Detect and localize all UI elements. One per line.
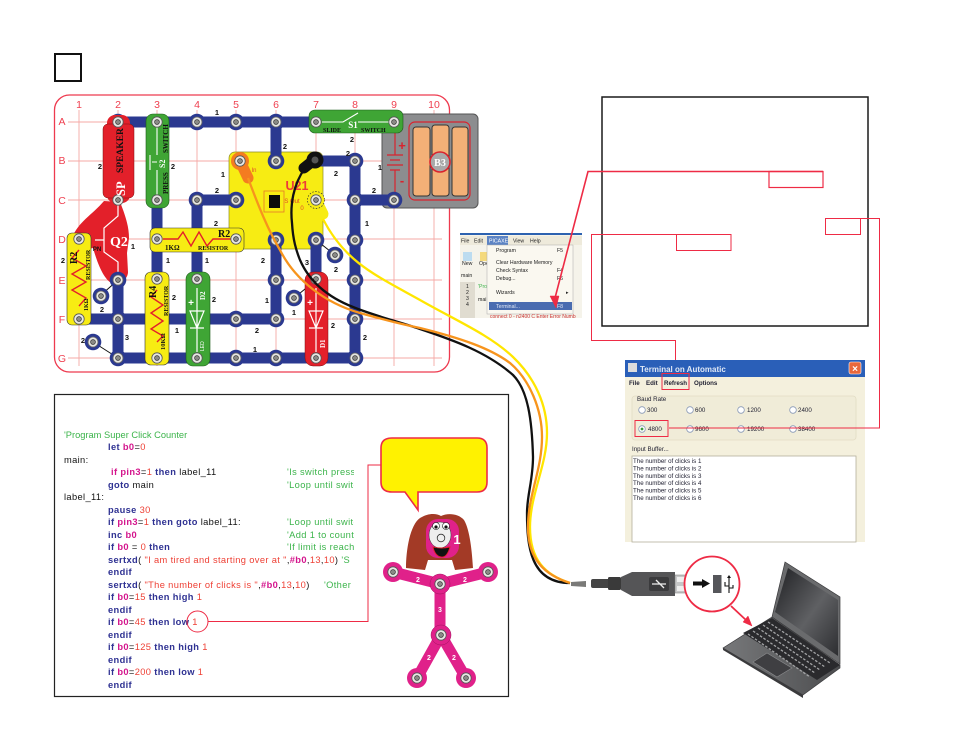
screenshot: PICAXE menu: 2 xyxy=(466,290,469,296)
screenshot: terminal window: 9600 xyxy=(695,426,709,433)
screenshot: PICAXE menu xyxy=(460,233,582,320)
part number labels: 1 xyxy=(215,108,219,117)
part number labels: 1 xyxy=(221,170,225,179)
panel: code listing: inc b0 xyxy=(108,530,137,540)
screenshot: PICAXE menu: Help xyxy=(530,238,541,244)
screenshot: PICAXE menu: F5 xyxy=(557,248,563,254)
part number labels: 1 xyxy=(365,219,369,228)
component: R2 horizontal resistor: RESISTOR xyxy=(198,246,229,252)
component: Q2 transistor: PN xyxy=(93,247,101,253)
component: R2 vertical resistor: R2 xyxy=(69,252,80,264)
panel: code listing: 'Loop until switch xyxy=(287,480,364,490)
cables to USB plug xyxy=(248,168,570,583)
part number labels: 1 xyxy=(265,296,269,305)
screenshot: terminal window: Terminal on Automatic xyxy=(640,365,726,374)
panel: instruction box xyxy=(602,97,868,326)
grid labels: E xyxy=(58,275,66,287)
grid labels: 4 xyxy=(194,99,200,111)
grid labels: 3 xyxy=(154,99,160,111)
part number labels: 2 xyxy=(283,142,287,151)
component: R2 horizontal resistor xyxy=(150,228,244,252)
part number labels: 2 xyxy=(61,256,65,265)
part number labels: 2 xyxy=(255,326,259,335)
component: S2 press switch xyxy=(146,114,170,208)
screenshot: PICAXE menu: Program xyxy=(496,248,516,254)
screenshot: terminal window: Input Buffer... xyxy=(632,446,669,453)
grid labels: 1 xyxy=(76,99,82,111)
part number labels: 2 xyxy=(215,186,219,195)
screenshot: terminal window: Baud Rate xyxy=(637,396,667,403)
laptop xyxy=(723,562,840,698)
component: R2 vertical resistor: 1KΩ xyxy=(84,298,90,311)
part number labels: 1 xyxy=(292,308,296,317)
screenshot: PICAXE menu: PICAXE xyxy=(489,238,509,244)
snap nodes xyxy=(85,114,402,366)
component: battery holder B3: B3 xyxy=(434,158,446,169)
component: R4 resistor: 10KΩ xyxy=(160,333,167,350)
panel: code listing: sertxd( "The number of clicks is ",#b0,13,10) xyxy=(108,580,310,590)
character mascot: 2 xyxy=(416,577,420,584)
component: speaker SP: SP xyxy=(114,181,128,196)
component: U21 yellow module: In xyxy=(251,168,257,174)
component: S2 press switch: PRESS xyxy=(162,172,170,194)
component: D2 LED xyxy=(186,272,210,366)
part number labels: 2 xyxy=(261,256,265,265)
panel: code listing: let b0=0 xyxy=(108,442,146,452)
component: D2 LED: + xyxy=(188,298,194,309)
grid labels: D xyxy=(58,234,66,246)
screenshot: PICAXE menu: F4 xyxy=(557,268,563,274)
panel: code listing: 'Other xyxy=(324,580,351,590)
panel: code listing: label_11: xyxy=(64,492,104,502)
grid labels: 7 xyxy=(313,99,319,111)
screenshot: terminal window: The number of clicks is 5 xyxy=(633,488,702,494)
grid labels: C xyxy=(58,195,66,207)
component: S1 slide switch: SWITCH xyxy=(361,128,386,134)
screenshot: terminal window: 2400 xyxy=(798,407,812,414)
panel: code listing: if b0 = 0 then xyxy=(108,542,170,552)
screenshot: terminal window: × xyxy=(852,364,858,375)
character mascot: 3 xyxy=(438,607,442,614)
grid labels xyxy=(58,99,440,365)
speech bubble xyxy=(381,438,487,510)
panel: code listing: endif xyxy=(108,680,133,690)
grid labels: 2 xyxy=(115,99,121,111)
component: D1 LED: D1 xyxy=(319,339,327,348)
panel: code listing: if b0=15 then high 1 xyxy=(108,592,202,602)
screenshot: terminal window: Refresh xyxy=(664,380,687,387)
panel: code listing: 'Loop until switch xyxy=(287,517,364,527)
screenshot: PICAXE menu: File xyxy=(461,238,469,244)
screenshot: terminal window: 38400 xyxy=(798,426,816,433)
part number labels: 1 xyxy=(253,345,257,354)
part number labels: 1 xyxy=(131,242,135,251)
panel: code listing: goto main xyxy=(108,480,154,490)
component: S1 slide switch xyxy=(309,110,403,134)
part number labels: 1 xyxy=(378,163,382,172)
part number labels: 2 xyxy=(372,186,376,195)
component: S2 press switch: S2 xyxy=(158,160,167,168)
screenshot: terminal window: Edit xyxy=(646,380,658,387)
part number labels: 2 xyxy=(214,219,218,228)
component: R4 resistor: R4 xyxy=(148,286,159,298)
grid labels: B xyxy=(58,155,66,167)
screenshot: PICAXE menu: 4 xyxy=(466,302,469,308)
screenshot: terminal window: The number of clicks is 6 xyxy=(633,495,702,502)
panel: code listing: sertxd( "I am tired and starting over at ",#b0,13,10) 'S xyxy=(108,555,350,565)
callout: USB port circle xyxy=(684,556,740,612)
component: Q2 transistor: Q2 xyxy=(110,235,128,250)
component: speaker SP: SPEAKER xyxy=(116,128,126,173)
component: D2 LED: LED xyxy=(200,341,206,351)
panel: code listing xyxy=(54,394,508,696)
component: D1 LED: + xyxy=(307,298,313,309)
screenshot: PICAXE menu: mai xyxy=(478,297,486,303)
panel: code listing: endif xyxy=(108,655,133,665)
jumper clip: orange xyxy=(240,161,248,178)
grid labels: 9 xyxy=(391,99,397,111)
screenshot: PICAXE menu: main xyxy=(461,273,472,279)
part number labels: 2 xyxy=(100,305,104,314)
blue snap wires xyxy=(79,122,394,358)
part number labels: 2 xyxy=(98,162,102,171)
part number labels: 2 xyxy=(171,162,175,171)
screenshot: PICAXE menu: F6 xyxy=(557,276,563,282)
screenshot: PICAXE menu: F8 xyxy=(557,304,563,310)
panel: code listing: if pin3=1 then label_11 xyxy=(111,467,217,477)
component: speaker SP xyxy=(103,115,134,205)
screenshot: terminal window xyxy=(625,360,865,542)
screenshot: terminal window: The number of clicks is 3 xyxy=(633,473,702,480)
part number labels: 3 xyxy=(305,258,309,267)
step number box xyxy=(55,54,81,81)
screenshot: PICAXE menu: 1 xyxy=(466,284,469,290)
screenshot: PICAXE menu: Ope xyxy=(479,261,489,267)
panel: code listing: endif xyxy=(108,630,133,640)
screenshot: PICAXE menu: Edit xyxy=(474,238,483,244)
grid labels: F xyxy=(59,314,65,326)
panel: code listing: 'Is switch pressed xyxy=(287,467,367,477)
screenshot: PICAXE menu: 'Pro xyxy=(478,284,487,290)
screenshot: PICAXE menu: Terminal... xyxy=(496,304,520,310)
component: U21 yellow module: S Out xyxy=(284,199,300,205)
panel: code listing: if b0=200 then low 1 xyxy=(108,667,203,677)
part number labels: 1 xyxy=(166,256,170,265)
screenshot: terminal window: The number of clicks is 4 xyxy=(633,480,702,487)
screenshot: PICAXE menu: New xyxy=(462,261,473,267)
red callout: baud rate link xyxy=(635,218,880,436)
component: battery holder B3 xyxy=(382,114,478,208)
panel: code listing: endif xyxy=(108,605,133,615)
grid labels: 5 xyxy=(233,99,239,111)
part number labels: 2 xyxy=(81,336,85,345)
component: battery holder B3: - xyxy=(400,173,404,188)
component: S1 slide switch: SLIDE xyxy=(323,128,341,134)
part number labels: 2 xyxy=(350,135,354,144)
screenshot: terminal window: 1200 xyxy=(747,407,761,414)
panel: code listing: endif xyxy=(108,567,133,577)
jumper clip: black xyxy=(304,160,314,168)
component: R4 resistor: RESISTOR xyxy=(164,285,170,316)
component: S1 slide switch: S1 xyxy=(348,120,358,130)
screenshot: PICAXE menu: Wizards xyxy=(496,290,515,296)
screenshot: terminal window: Options xyxy=(694,380,718,387)
part number labels: 2 xyxy=(334,265,338,274)
part number labels: 2 xyxy=(363,333,367,342)
panel: code listing: if b0=45 then low 1 xyxy=(108,617,198,627)
panel: code listing: main: xyxy=(64,455,89,465)
component: battery holder B3: + xyxy=(398,138,406,153)
callout line from code to speech bubble xyxy=(187,465,382,632)
component: S2 press switch: SWITCH xyxy=(162,124,170,153)
screenshot: PICAXE menu: Clear Hardware Memory xyxy=(496,260,553,266)
panel: snap circuit board xyxy=(54,95,478,372)
part number labels: 2 xyxy=(334,169,338,178)
arrow to laptop xyxy=(731,606,752,626)
panel: code listing: if pin3=1 then goto label_11: xyxy=(108,517,241,527)
character mascot: 2 xyxy=(427,655,431,662)
part number labels: 2 xyxy=(172,293,176,302)
USB plug xyxy=(571,572,690,596)
component: R2 vertical resistor xyxy=(67,233,92,325)
component: D2 LED: D2 xyxy=(199,291,207,300)
panel: code listing: 'Add 1 to count xyxy=(287,530,354,540)
screenshot: PICAXE menu: Debug... xyxy=(496,276,516,282)
component: R4 resistor xyxy=(145,272,170,365)
part number labels: 1 xyxy=(175,326,179,335)
screenshot: PICAXE menu: connect 0 - n2400 C Enter Error Numb xyxy=(490,314,576,320)
grid labels: A xyxy=(58,116,66,128)
screenshot: PICAXE menu: Check Syntax xyxy=(496,268,528,274)
component: Q2 transistor xyxy=(72,201,129,288)
part number labels: 2 xyxy=(346,149,350,158)
part number labels: 3 xyxy=(125,333,129,342)
component: D1 LED xyxy=(305,272,328,366)
panel: code listing: if b0=125 then high 1 xyxy=(108,642,208,652)
screenshot: terminal window: 600 xyxy=(695,407,706,414)
screenshot: PICAXE menu: ▸ xyxy=(566,290,569,296)
panel: code listing: 'If limit is reached xyxy=(287,542,366,552)
screenshot: terminal window: 19200 xyxy=(747,426,765,433)
grid labels: 8 xyxy=(352,99,358,111)
red callout: Terminal menu arrow xyxy=(550,172,823,308)
grid labels: 10 xyxy=(428,99,440,111)
component: U21 yellow module: U21 xyxy=(286,179,309,193)
part number labels: 2 xyxy=(331,321,335,330)
screenshot: PICAXE menu: 3 xyxy=(466,296,469,302)
red callout: Refresh link xyxy=(592,234,731,390)
component: R2 horizontal resistor: R2 xyxy=(218,229,230,240)
part number labels xyxy=(61,108,382,354)
component: R2 horizontal resistor: 1KΩ xyxy=(165,244,180,252)
panel: code listing: 'Program Super Click Counter xyxy=(64,430,187,440)
component: U21 yellow module xyxy=(229,152,323,249)
character mascot: 2 xyxy=(463,577,467,584)
jumper clip: yellow xyxy=(316,200,323,214)
character mascot: 2 xyxy=(452,655,456,662)
screenshot: terminal window: The number of clicks is 2 xyxy=(633,466,702,472)
part number labels: 2 xyxy=(212,295,216,304)
grid labels: 6 xyxy=(273,99,279,111)
part number labels: 1 xyxy=(205,256,209,265)
character mascot: 1 xyxy=(453,532,461,547)
screenshot: terminal window: The number of clicks is 1 xyxy=(633,458,702,465)
screenshot: terminal window: File xyxy=(629,380,640,387)
panel: code listing: pause 30 xyxy=(108,505,151,515)
character mascot xyxy=(383,514,498,688)
screenshot: PICAXE menu: View xyxy=(513,238,524,244)
grid labels: G xyxy=(58,353,66,365)
screenshot: terminal window: 300 xyxy=(647,407,658,414)
component: U21 yellow module: 0 xyxy=(300,206,304,212)
component: R2 vertical resistor: RESISTOR xyxy=(86,249,92,280)
screenshot: terminal window: 4800 xyxy=(648,426,662,433)
